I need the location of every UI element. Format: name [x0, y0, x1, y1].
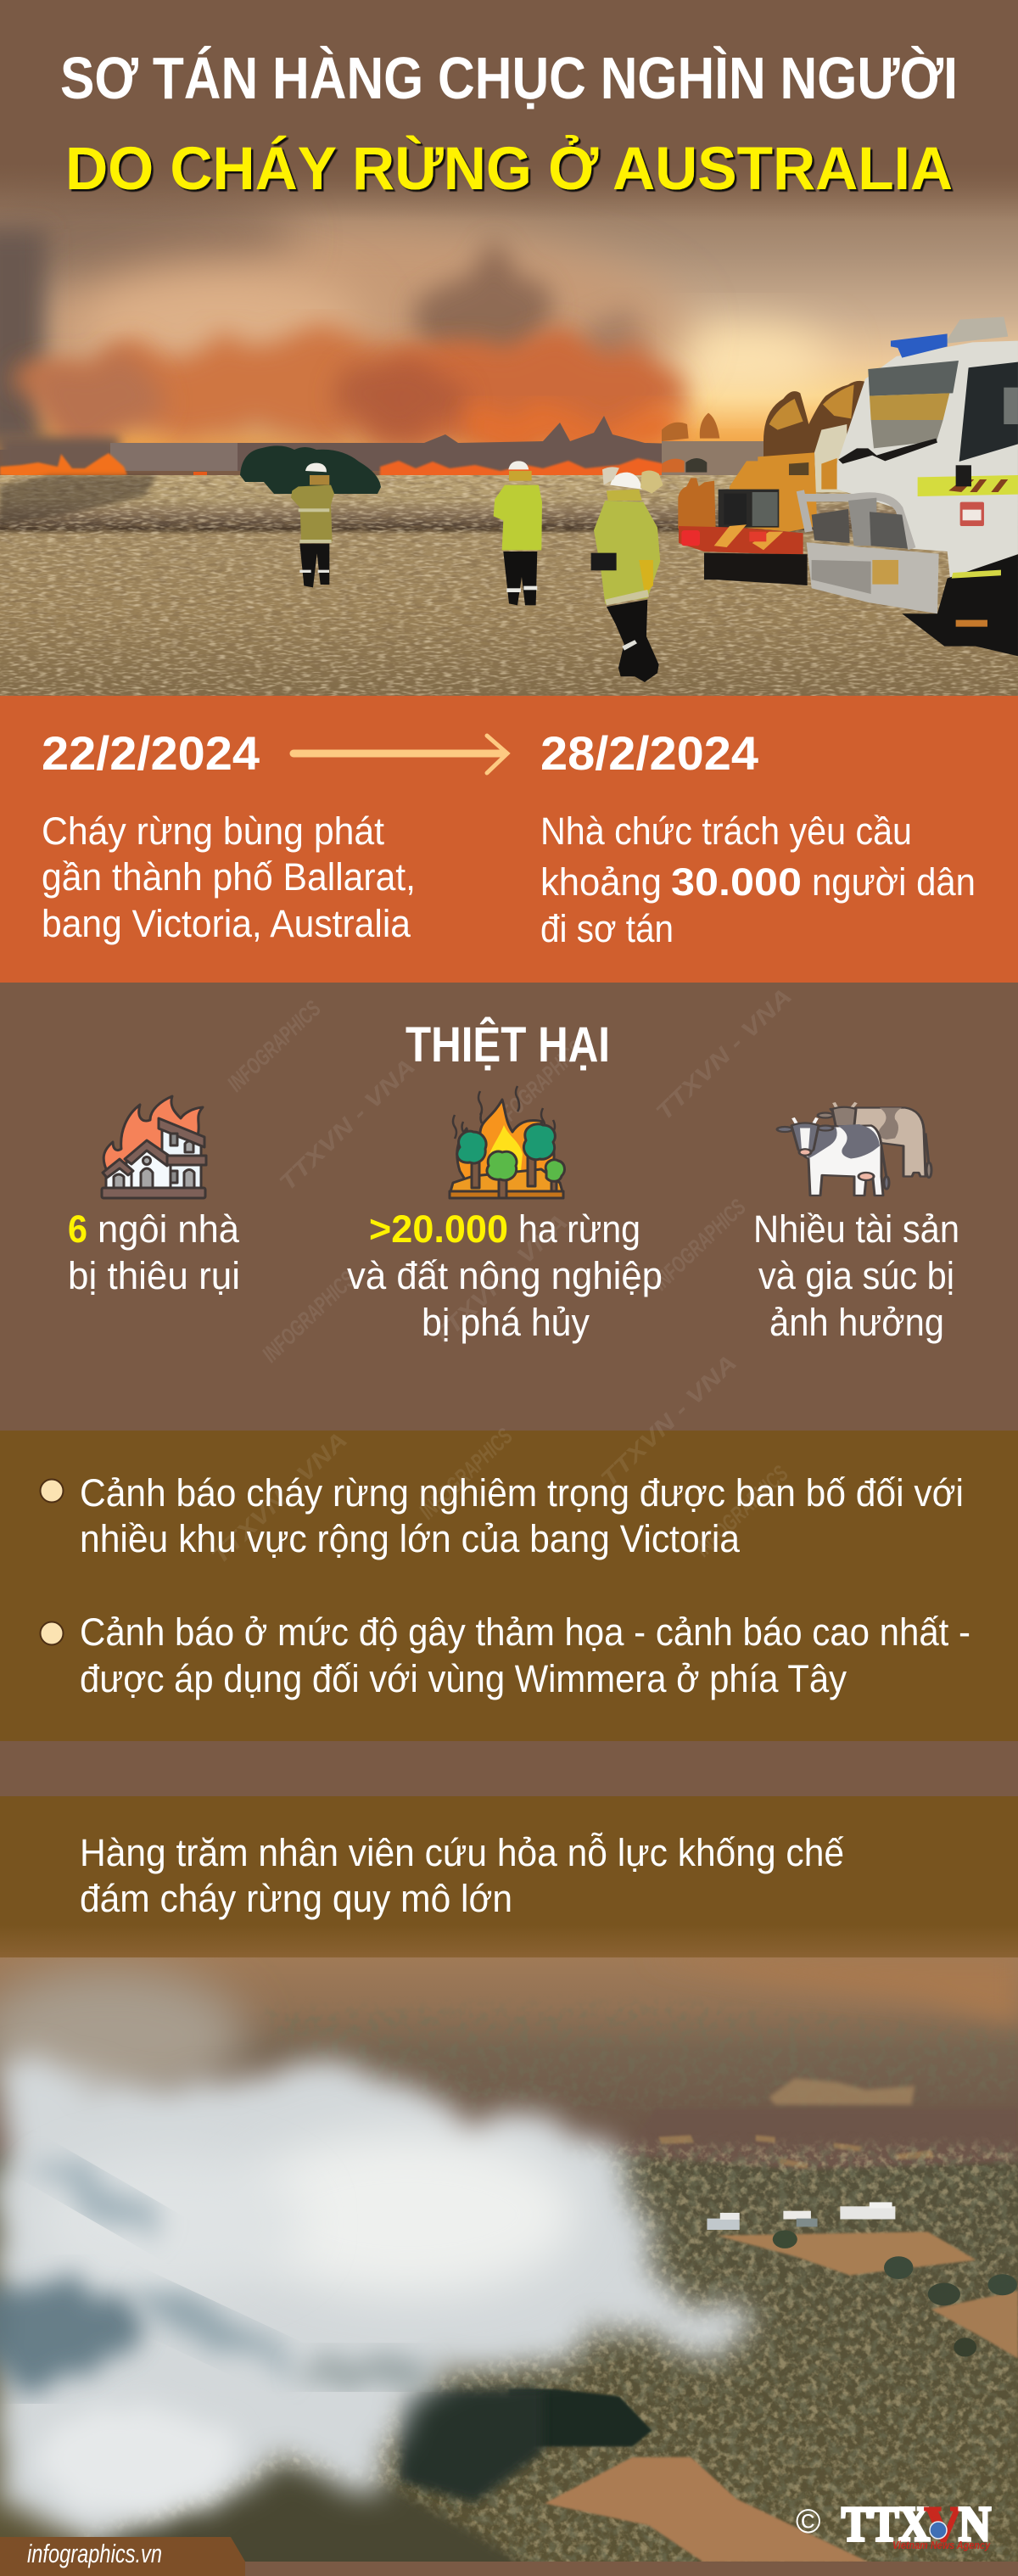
firefighters [291, 461, 663, 682]
pastures [717, 2232, 976, 2276]
watermarks: INFOGRAPHICS [414, 1423, 517, 1524]
icon: burning house [102, 1096, 206, 1198]
text: property and livestock: ảnh hưởng [769, 1301, 944, 1344]
title line 2: DO CHÁY RỪNG Ở AUSTRALIA [65, 135, 953, 203]
logo tagline: Vietnam News Agency [892, 2539, 991, 2551]
field [0, 475, 1018, 696]
distant smoke band and treeline [0, 416, 662, 471]
text: start of fire: bang Victoria, Australia [42, 902, 411, 945]
photo: aerial view of smoke over forest [0, 1957, 1018, 2576]
text: evacuation: đi sơ tán [540, 907, 674, 950]
watermarks: TTXVN - VNA [274, 1054, 420, 1196]
bullet 1 [41, 1480, 63, 1502]
houses [707, 2219, 740, 2230]
copyright mark: © [796, 2503, 820, 2540]
front cow [777, 1118, 889, 1196]
source tab [0, 2537, 245, 2576]
firefighter left [291, 463, 334, 587]
watermarks: INFOGRAPHICS [222, 995, 326, 1096]
bush [240, 445, 381, 494]
firefighters in orange [678, 478, 716, 529]
icon: burning forest [450, 1086, 564, 1198]
text: property and livestock: Nhiều tài sản [753, 1207, 959, 1251]
panel: warnings [0, 1350, 1018, 1741]
warning text 2: được áp dụng đối với vùng Wimmera ở phía Tây [80, 1657, 847, 1700]
bumper [807, 542, 939, 613]
logo: TTXVN [796, 2496, 991, 2551]
distant ground [662, 441, 704, 475]
panel: firefighters effort [0, 1796, 1018, 1957]
right-side terrain [626, 2078, 1018, 2170]
trees on pastures [773, 2230, 797, 2248]
text: evacuation: người dân [812, 860, 976, 904]
bottom strip [0, 2562, 1018, 2576]
warning text 1: nhiều khu vực rộng lớn của bang Victoria [80, 1517, 741, 1560]
fence and dark brush left [0, 475, 157, 524]
warning text 2 [80, 1610, 970, 1700]
white cab body [837, 341, 1018, 579]
fire trucks [662, 316, 1018, 656]
text: forest: >20.000 [369, 1207, 508, 1251]
foreground trees [85, 2465, 543, 2576]
burning flame line left [0, 452, 128, 475]
text: property and livestock [753, 1207, 959, 1344]
text: forest: bị phá hủy [422, 1301, 590, 1344]
arrow [294, 736, 507, 773]
text: houses: ngôi nhà [98, 1207, 240, 1251]
chassis and wheel [902, 554, 1018, 656]
firefighter centre [494, 461, 542, 605]
windshield [870, 393, 949, 420]
logo wordmark: TTX [842, 2496, 930, 2551]
trees behind trucks [662, 381, 865, 458]
warning text 1 [80, 1471, 964, 1560]
watermarks: INFOGRAPHICS [257, 1266, 361, 1367]
hazy distant forest [255, 2002, 1018, 2113]
watermarks: TTXVN - VNA [651, 983, 797, 1125]
watermarks: TTXVN - VNA [427, 1209, 573, 1351]
smoke plume [0, 1968, 747, 2533]
text: evacuation: khoảng [540, 860, 662, 904]
emergency sign [960, 502, 984, 526]
text: evacuation: 30.000 [671, 860, 802, 904]
watermarks: INFOGRAPHICS [485, 1035, 589, 1136]
text: start of fire [42, 809, 416, 945]
watermarks: TTXVN - VNA [206, 1427, 352, 1569]
text: start of fire: Cháy rừng bùng phát [42, 809, 384, 853]
panel: timeline [0, 696, 1018, 983]
text: forest: ha rừng [518, 1207, 640, 1251]
date 1: 22/2/2024 [42, 726, 260, 780]
header fade [0, 0, 1018, 161]
panel: firefighters effort: Hàng trăm nhân viên cứu hỏa nỗ lực khống chế [80, 1831, 844, 1874]
bullet 2 [41, 1622, 63, 1644]
text: evacuation: Nhà chức trách yêu cầu [540, 809, 912, 853]
dark forest left [399, 2388, 543, 2503]
dark pine forest [509, 2389, 652, 2446]
firefighter right [591, 467, 663, 682]
burning flame line centre [380, 458, 679, 477]
panel: damage [0, 983, 1018, 1431]
logo wordmark [842, 2496, 991, 2551]
photo: firefighters watching grass fire [0, 183, 1018, 696]
source text: infographics.vn [27, 2539, 162, 2568]
roof lights [944, 316, 1008, 344]
text: forest: và đất nông nghiệp [347, 1254, 663, 1297]
warning text 1: Cảnh báo cháy rừng nghiêm trọng được ban bố đối với [80, 1471, 964, 1515]
warning text 2: Cảnh báo ở mức độ gây thảm họa - cảnh báo cao nhất - [80, 1610, 970, 1654]
back cow [818, 1103, 931, 1178]
watermarks [206, 1350, 793, 1569]
text: houses: 6 [68, 1207, 87, 1251]
watermarks: INFOGRAPHICS [647, 1194, 751, 1295]
date 2: 28/2/2024 [540, 726, 758, 780]
icon: cows [777, 1103, 931, 1196]
stripe [918, 475, 1018, 496]
panel: firefighters effort: đám cháy rừng quy mô lớn [80, 1877, 512, 1920]
text: start of fire: gần thành phố Ballarat, [42, 855, 416, 899]
second cab behind [814, 424, 847, 492]
logo wordmark: N [959, 2496, 991, 2551]
title [60, 45, 958, 203]
logo wordmark: V [925, 2496, 962, 2551]
text: houses: bị thiêu rụi [68, 1254, 240, 1297]
watermarks: INFOGRAPHICS [690, 1460, 793, 1561]
text: forest [347, 1207, 663, 1344]
watermarks: TTXVN - VNA [596, 1350, 741, 1492]
text: houses [68, 1207, 240, 1297]
watermarks [222, 983, 797, 1367]
door window [959, 362, 1018, 462]
forest texture [85, 2147, 1018, 2576]
text: evacuation [540, 809, 976, 950]
bull bar [800, 490, 912, 549]
heading: THIỆT HẠI [406, 1017, 610, 1072]
text: property and livestock: và gia súc bị [758, 1254, 954, 1297]
orange engine body [730, 452, 817, 532]
